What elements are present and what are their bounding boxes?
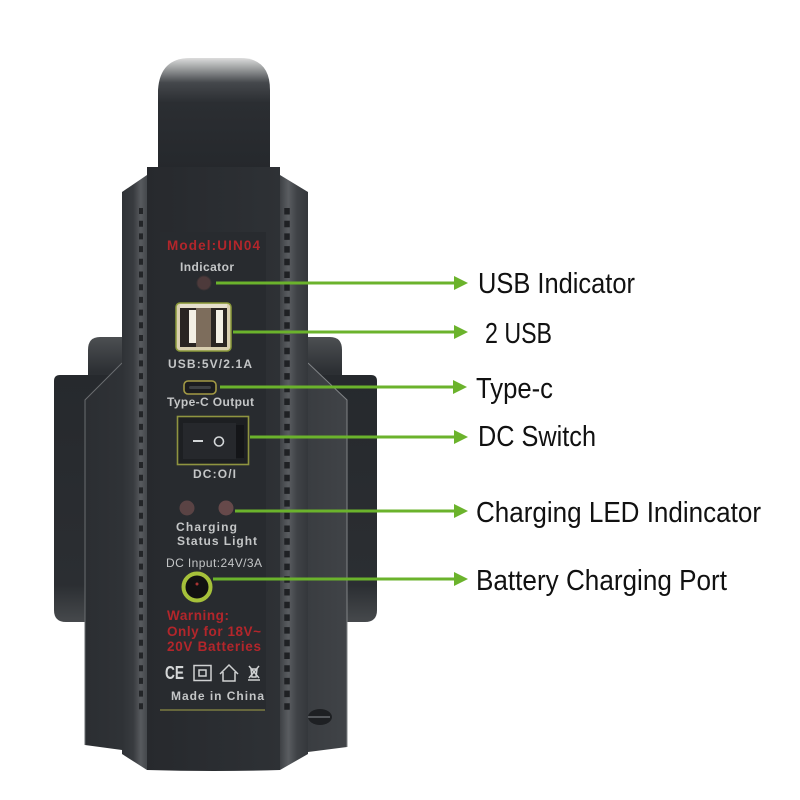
double insulation [194, 666, 211, 680]
handle [158, 58, 270, 170]
home use [220, 665, 238, 681]
made in China label: Made in China [171, 689, 264, 703]
mounting knob [308, 709, 332, 725]
warning text: Warning: [167, 608, 229, 623]
charging status label: Charging [176, 520, 237, 534]
label: 2 USB: 2 USB [485, 318, 552, 350]
arrow: Type-c [220, 380, 467, 394]
label: Battery Charging Port: Battery Charging Port [476, 565, 727, 597]
certification icons [165, 663, 260, 683]
DC charging jack [184, 574, 210, 600]
dual USB port [176, 303, 231, 351]
WEEE bin [248, 666, 260, 680]
arrow: DC switch [250, 430, 468, 444]
warning text: 20V Batteries [167, 639, 261, 654]
USB indicator LED [197, 276, 211, 290]
DC input label: DC Input:24V/3A [166, 556, 262, 570]
Type-C port [184, 381, 216, 394]
DC switch label: DC:O/I [193, 467, 236, 481]
Type-C label: Type-C Output [167, 395, 254, 409]
warning text [167, 608, 261, 654]
model label: Model:UIN04 [167, 238, 260, 253]
arrow: USB indicator [216, 276, 468, 290]
right ventilation slots [284, 208, 290, 716]
charging status label [176, 520, 257, 548]
side panels [85, 363, 347, 752]
centre column [147, 167, 280, 771]
arrow: 2 USB [233, 325, 468, 339]
left ventilation slots [139, 208, 143, 716]
DC switch [178, 416, 248, 464]
USB rating label: USB:5V/2.1A [168, 357, 252, 371]
arrow: charging LED [235, 504, 468, 518]
plate underline [160, 709, 265, 711]
CE mark: CE [165, 663, 184, 683]
label plate [160, 232, 266, 710]
charging LEDs [180, 500, 234, 516]
back plate [54, 337, 377, 630]
label: Type-c: Type-c [476, 373, 553, 405]
warning text: Only for 18V~ [167, 624, 261, 639]
charging status label: Status Light [177, 534, 257, 548]
right shoulder column [280, 175, 308, 770]
arrow: charging port [213, 572, 468, 586]
label: Charging LED Indincator: Charging LED Indincator [476, 497, 761, 529]
label: USB Indicator: USB Indicator [478, 268, 635, 300]
label: DC Switch: DC Switch [478, 421, 596, 453]
indicator label: Indicator [180, 260, 234, 274]
left shoulder column [122, 175, 147, 770]
product photo: charger body [54, 58, 377, 771]
